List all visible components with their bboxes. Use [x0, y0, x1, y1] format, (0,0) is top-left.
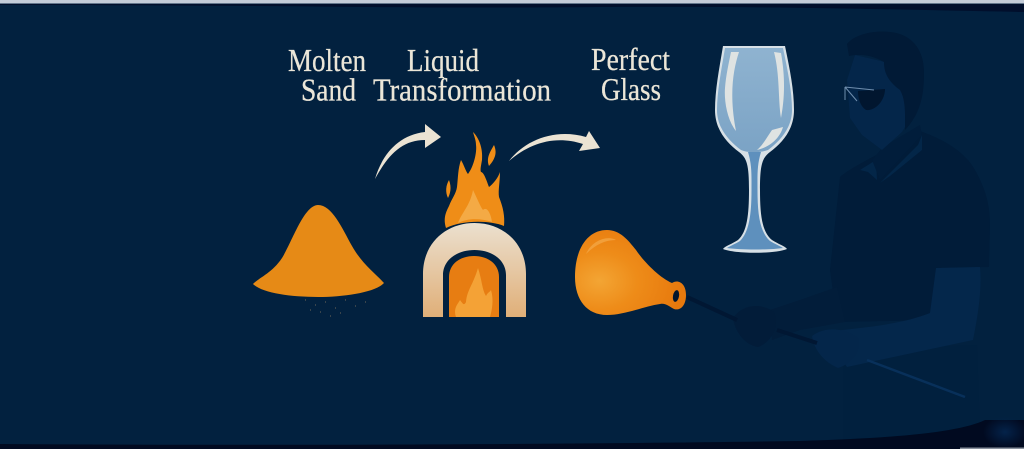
furnace mouth	[449, 256, 499, 317]
hair	[847, 32, 924, 130]
highlight left	[725, 52, 739, 131]
far hand	[733, 306, 776, 347]
arch	[423, 223, 526, 317]
top flame	[445, 132, 504, 228]
step label: Molten Sand: Molten	[288, 42, 366, 78]
furnace fire	[455, 268, 493, 317]
bottom edge strip	[0, 416, 1024, 449]
flame spark left	[446, 180, 451, 198]
step label: Perfect Glass: Perfect	[591, 41, 670, 77]
sunglasses	[845, 87, 885, 110]
step label: Perfect Glass: Glass	[601, 71, 661, 107]
face	[847, 55, 915, 150]
shirt torso	[830, 131, 990, 322]
neck	[872, 125, 922, 180]
bowl	[717, 48, 792, 152]
flame spark right	[488, 145, 496, 166]
scattered grains	[305, 300, 366, 316]
step label: Molten Sand: Sand	[301, 72, 356, 108]
highlight bottom	[757, 127, 783, 150]
blob highlight	[586, 238, 616, 254]
step label: Liquid Transformation: Transformation	[373, 72, 551, 108]
stem and foot	[727, 152, 783, 250]
step label: Molten Sand	[288, 42, 366, 108]
step label: Perfect Glass	[591, 41, 670, 107]
arrow: furnace to glass	[509, 131, 600, 161]
step label: Liquid Transformation	[373, 42, 551, 108]
silhouette: glassblower	[687, 32, 990, 440]
icon: molten glass blob	[575, 230, 686, 315]
near hand	[812, 329, 859, 368]
highlight right	[774, 52, 784, 118]
arm	[823, 267, 981, 367]
mouth hole	[672, 290, 680, 302]
icon: sand pile	[253, 205, 384, 316]
pipe lower	[867, 360, 965, 397]
legs	[843, 345, 980, 440]
top edge strip	[0, 0, 1024, 12]
arrow: sand to furnace	[375, 124, 441, 179]
far arm	[770, 287, 845, 340]
blowpipe	[687, 297, 817, 343]
collar	[860, 135, 922, 183]
icon: furnace with flames	[423, 132, 526, 317]
step label: Liquid Transformation: Liquid	[407, 42, 479, 78]
inner flame	[458, 190, 492, 223]
icon: wine glass	[715, 46, 794, 253]
